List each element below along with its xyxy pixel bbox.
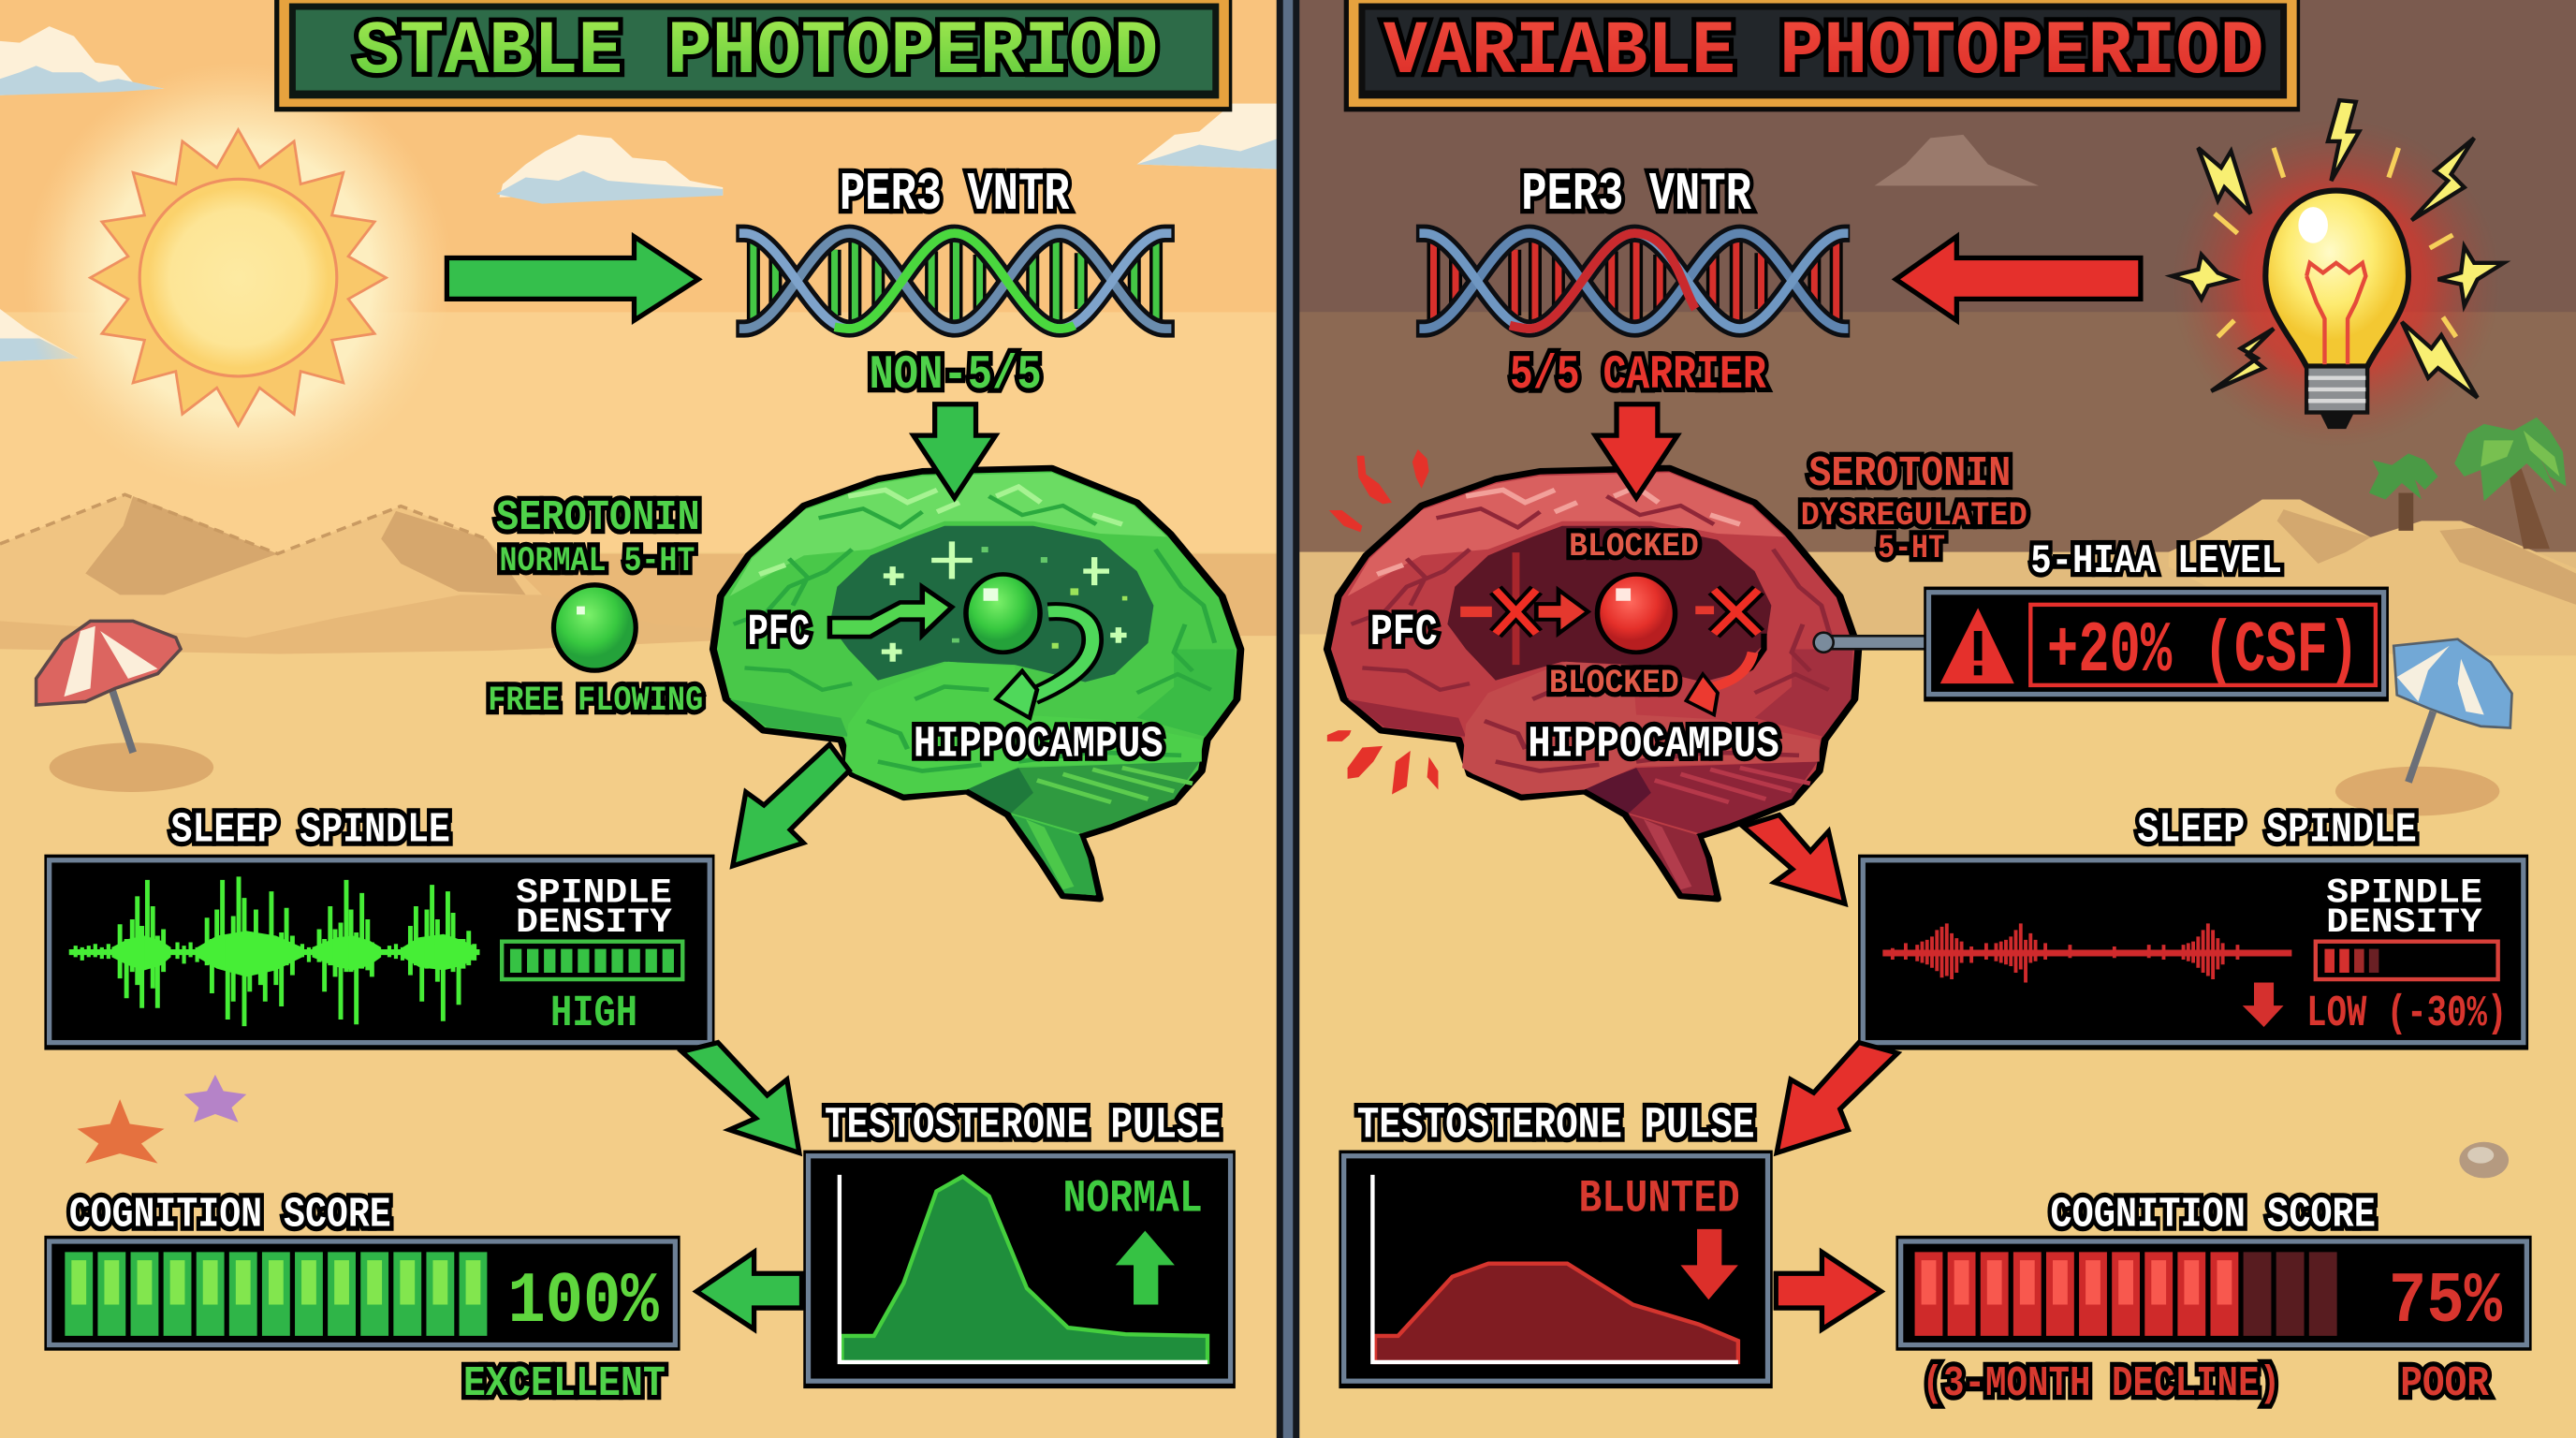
arrow: DNA to brain right <box>1595 404 1677 498</box>
label: free flowing: FREE FLOWING <box>488 682 703 721</box>
label: sleep spindle left: SLEEP SPINDLE <box>171 806 450 855</box>
icon: up arrow <box>1116 1231 1175 1305</box>
umbrella: left beach <box>37 621 213 792</box>
background: right night-lit desert scene <box>1298 0 2576 1438</box>
panel: testosterone pulse left: NORMAL <box>1063 1173 1203 1225</box>
label: 5-HIAA level: 5-HIAA LEVEL <box>2030 538 2282 585</box>
label: serotonin left: SEROTONIN <box>496 493 700 542</box>
panel: cognition score right: 75% <box>2389 1262 2503 1343</box>
icon: down arrow low <box>2243 983 2284 1027</box>
chart: spindle waveform left <box>69 876 479 1026</box>
label: serotonin left <box>496 493 700 581</box>
arrow: brain to sleep spindle right <box>1743 815 1845 903</box>
label: blocked bottom: BLOCKED <box>1549 665 1679 702</box>
icon: light bulb with bolts <box>2172 100 2504 447</box>
panel: cognition score left: 100% <box>507 1262 659 1343</box>
brain: green healthy <box>713 468 1240 899</box>
title: stable photoperiod <box>274 0 1232 111</box>
label: 5/5 carrier: 5/5 CARRIER <box>1510 349 1766 403</box>
label: 3-month decline: (3-MONTH DECLINE) <box>1922 1359 2280 1408</box>
label: testosterone pulse left: TESTOSTERONE PULSE <box>825 1102 1221 1152</box>
label: NON-5/5: NON-5/5 <box>869 349 1042 403</box>
arrow: light to DNA <box>1895 237 2141 320</box>
panel: sleep spindle left: HIGH <box>550 990 637 1039</box>
panel: sleep spindle left: DENSITY <box>516 903 673 943</box>
icon: red flashes around brain <box>1327 449 1438 795</box>
arrow: testosterone to cognition left <box>696 1252 801 1329</box>
label: serotonin dysregulated: DYSREGULATED <box>1801 497 2027 535</box>
label: serotonin dysregulated <box>1801 449 2027 567</box>
label: poor: POOR <box>2400 1359 2490 1408</box>
panel: sleep spindle right <box>1858 855 2528 1050</box>
label: PER3 VNTR left: PER3 VNTR <box>840 165 1070 226</box>
starfish <box>77 1075 246 1164</box>
bar meter: 10 of 13 segments <box>1928 1252 2323 1336</box>
label: serotonin left: NORMAL 5-HT <box>500 542 695 581</box>
panel: cognition score left <box>44 1236 681 1351</box>
panel: sleep spindle left <box>44 855 714 1050</box>
brain: red dysregulated <box>1327 468 1858 899</box>
panel: cognition score right <box>1895 1236 2532 1351</box>
panel: sleep spindle right: LOW (-30%) <box>2306 990 2507 1039</box>
arrow: sleep spindle to testosterone left <box>681 1043 799 1152</box>
arrow: testosterone to cognition right <box>1776 1252 1881 1329</box>
arrow: sun to DNA <box>446 237 698 320</box>
panel: sleep spindle right: DENSITY <box>2326 903 2483 943</box>
connector: panel to brain <box>1814 633 1925 653</box>
background: left desert scene <box>0 0 1280 1438</box>
sun <box>23 63 453 493</box>
title: variable photoperiod: VARIABLE PHOTOPERIOD <box>1383 10 2264 95</box>
chart: testosterone curve blunted <box>1372 1175 1738 1362</box>
arrow: DNA to brain left <box>914 404 996 498</box>
label: PFC right: PFC <box>1370 609 1438 658</box>
bar meter: 13 of 13 segments <box>79 1252 473 1336</box>
panel: testosterone pulse right: BLUNTED <box>1579 1173 1740 1225</box>
panel: sleep spindle right: SPINDLE <box>2326 874 2482 914</box>
arrow: brain to sleep spindle left <box>733 744 849 866</box>
label: PFC left: PFC <box>748 609 810 658</box>
palm trees <box>2369 418 2566 549</box>
title: stable photoperiod: STABLE PHOTOPERIOD <box>355 10 1158 95</box>
label: serotonin dysregulated: 5-HT <box>1878 530 1945 567</box>
panel: testosterone pulse left <box>803 1151 1236 1388</box>
label: hippocampus left: HIPPOCAMPUS <box>914 720 1164 770</box>
icon: down arrow <box>1680 1229 1738 1299</box>
label: hippocampus right: HIPPOCAMPUS <box>1528 720 1779 770</box>
label: serotonin dysregulated: SEROTONIN <box>1808 449 2011 498</box>
panel: sleep spindle left: SPINDLE <box>516 874 672 914</box>
panel: 5-HIAA: +20% (CSF) <box>2047 611 2359 693</box>
label: cognition score right: COGNITION SCORE <box>2050 1190 2376 1239</box>
icon: warning triangle <box>1940 608 2014 683</box>
arrow: sleep spindle to testosterone right <box>1777 1043 1897 1152</box>
icon: DNA helix right <box>1416 233 1850 329</box>
chart: testosterone curve normal <box>840 1175 1208 1362</box>
gauge: spindle density low <box>2316 942 2498 979</box>
label: blocked top: BLOCKED <box>1569 528 1699 565</box>
label: PER3 VNTR right: PER3 VNTR <box>1521 165 1751 226</box>
label: cognition score left: COGNITION SCORE <box>69 1190 391 1239</box>
chart: spindle waveform right <box>1882 923 2291 983</box>
label: testosterone pulse right: TESTOSTERONE PULSE <box>1357 1102 1754 1152</box>
label: sleep spindle right: SLEEP SPINDLE <box>2137 806 2417 855</box>
panel: testosterone pulse right <box>1339 1151 1773 1388</box>
divider <box>1277 0 1299 1438</box>
panel: 5-HIAA <box>1924 587 2389 701</box>
umbrella: right beach <box>2335 639 2512 815</box>
gauge: spindle density high <box>502 942 682 979</box>
label: excellent: EXCELLENT <box>463 1359 666 1408</box>
rock <box>2459 1142 2509 1178</box>
icon: DNA helix left <box>736 233 1175 329</box>
icon: serotonin orb left <box>553 585 636 670</box>
